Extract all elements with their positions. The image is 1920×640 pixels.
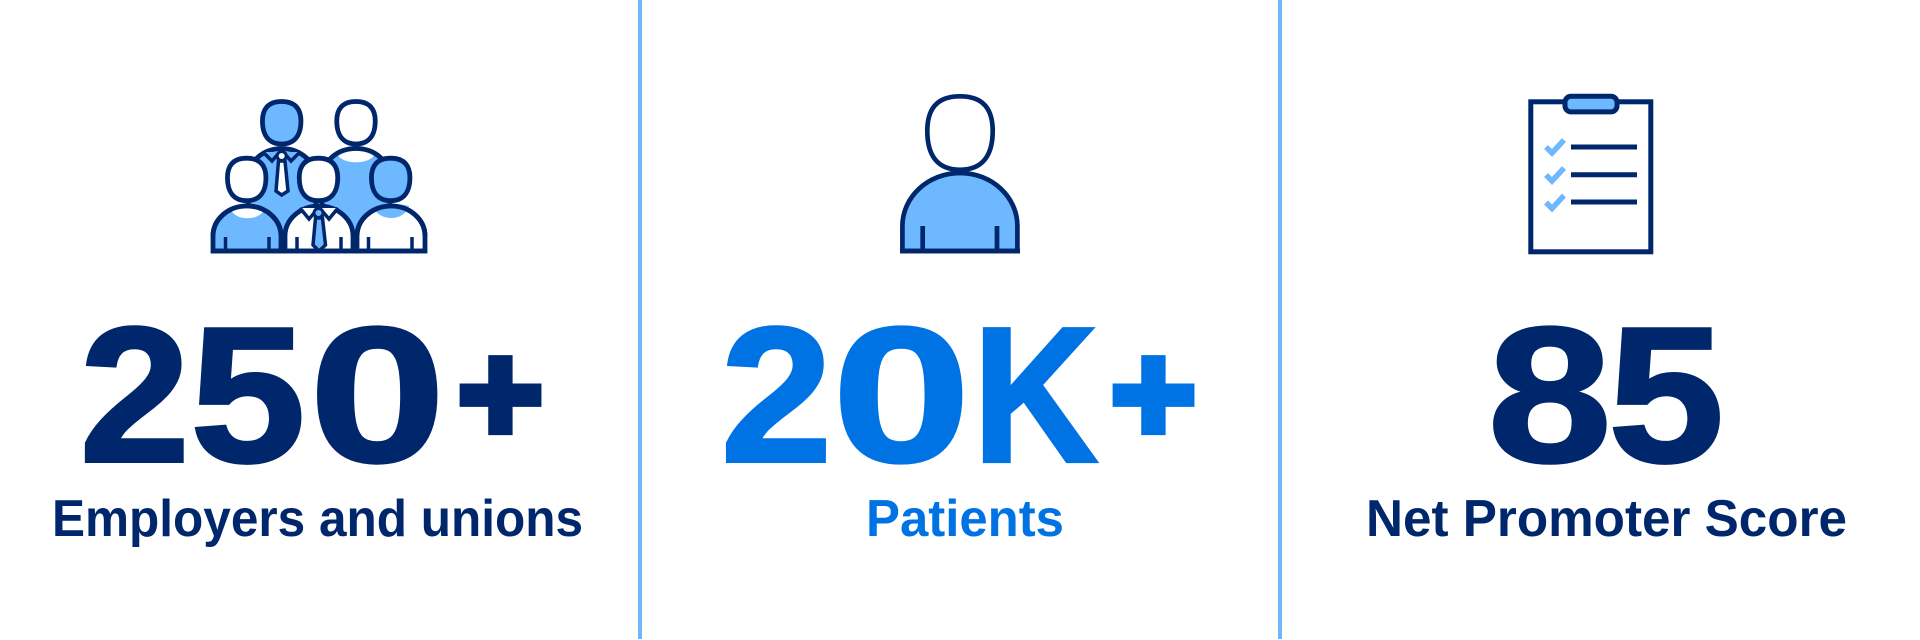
panel: employers and unions (52, 102, 583, 548)
person: back left with tie (248, 102, 316, 245)
person: front left (213, 158, 281, 253)
panel: net promoter score (1366, 96, 1847, 548)
number: 250+: 5 (190, 287, 306, 503)
number: 20K+: + (1110, 314, 1196, 473)
number: 250+: + (458, 314, 543, 473)
person: back right (322, 102, 390, 245)
number: 20K+: 2 (720, 286, 832, 503)
number: 250+: 2 (80, 287, 190, 503)
number: 250+: 0 (309, 287, 446, 503)
label: net promoter score: Net Promoter Score (1366, 490, 1847, 548)
number: 20K+: 0 (832, 288, 971, 503)
number: 85 (1488, 287, 1724, 503)
person: front middle with tie (285, 158, 353, 253)
panel: patients (720, 96, 1196, 548)
number: 250+ (80, 287, 543, 503)
icon: clipboard checklist (1531, 96, 1651, 252)
number: 85: 5 (1608, 287, 1724, 503)
number: 20K+ (720, 286, 1196, 503)
person: front right (357, 158, 425, 253)
label: patients: Patients (866, 490, 1064, 548)
label: employers and unions: Employers and unions (52, 490, 583, 548)
icon: person (900, 96, 1020, 252)
number: 20K+: K (973, 287, 1098, 503)
icon: check marks (1546, 140, 1564, 208)
icon: group of five people (211, 102, 427, 253)
number: 85: 8 (1488, 288, 1612, 503)
